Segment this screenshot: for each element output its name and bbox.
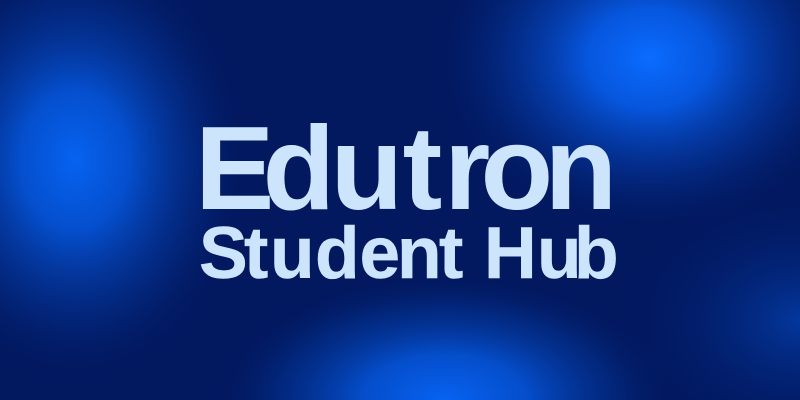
title: Edutron: Edutron — [195, 102, 617, 235]
subtitle: Student Hub: Student Hub — [199, 213, 619, 294]
